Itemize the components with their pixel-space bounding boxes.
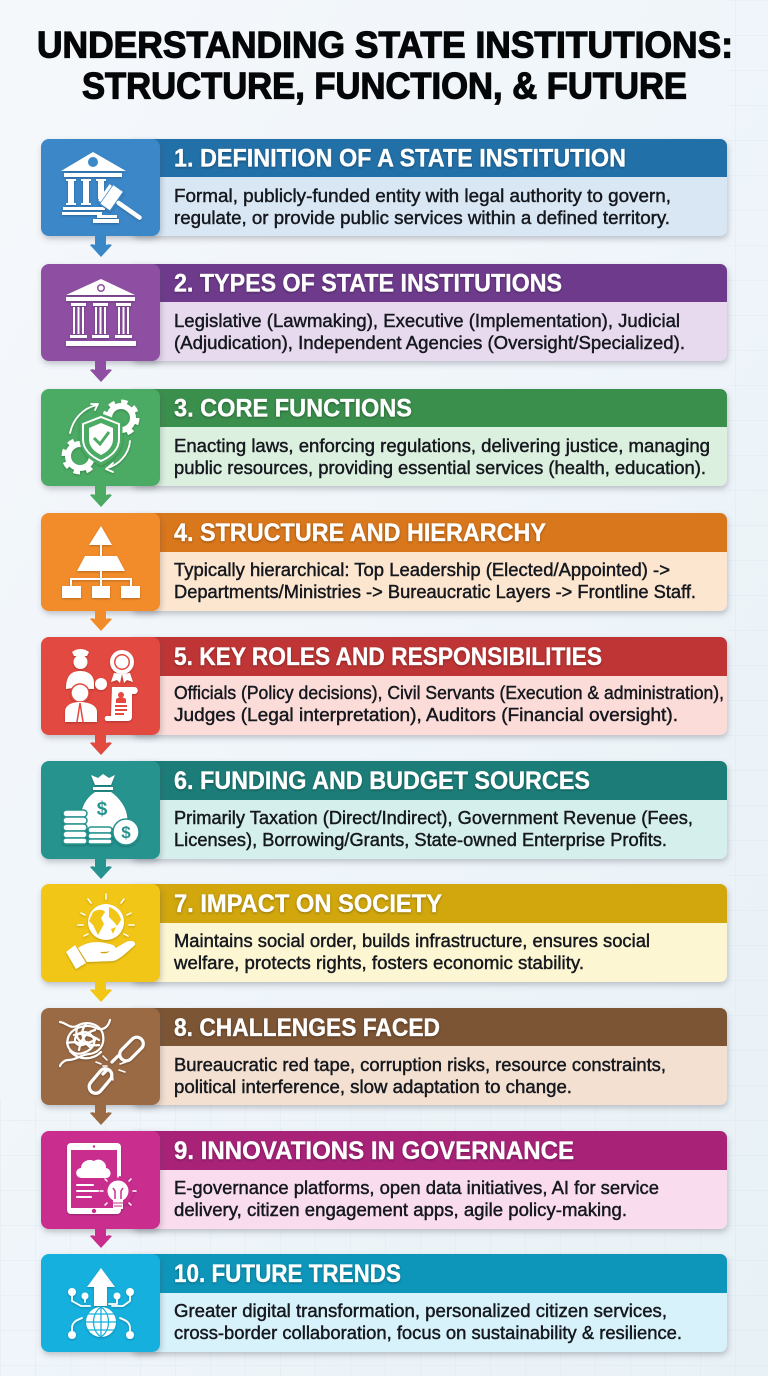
icon tile [41,637,160,735]
title [37,24,733,106]
heading: 8. CHALLENGES FACED [174,1014,440,1042]
description [174,1300,682,1343]
panel: 6 funding [41,761,727,879]
heading: 2. TYPES OF STATE INSTITUTIONS [174,270,562,298]
content panel [131,1008,727,1105]
description: Enacting laws, enforcing regulations, delivering justice, managing [174,435,710,456]
arrow to next panel [90,235,112,257]
content panel [131,389,727,486]
icon tile [41,513,160,611]
icon: money bag and coins: $ [97,799,108,820]
icon tile [41,1254,160,1352]
panel: 3 core functions [41,389,727,507]
description: Licenses), Borrowing/Grants, State-owned Enterprise Profits. [174,829,667,850]
description [174,185,671,228]
content panel [131,513,727,611]
description: Judges (Legal interpretation), Auditors (Financial oversight). [174,704,678,725]
description [174,559,696,602]
icon tile [41,884,160,982]
arrow to next panel [90,1228,112,1248]
description [173,930,650,973]
icon: money bag and coins: $ [121,823,131,842]
icon: officials, medal and scroll [65,649,138,722]
icon: tangled tape and broken chain [60,1020,146,1096]
description: Primarily Taxation (Direct/Indirect), Government Revenue (Fees, [174,807,693,828]
description: political interference, slow adaptation to change. [174,1076,572,1097]
description: (Adjudication), Independent Agencies (Oversight/Specialized). [174,332,685,353]
description: Typically hierarchical: Top Leadership (Elected/Appointed) -> [174,559,670,580]
description [174,310,685,353]
panel: 10 future trends [41,1254,727,1352]
heading: 6. FUNDING AND BUDGET SOURCES [174,767,590,795]
icon: arrow, globe and circuit [68,1268,134,1339]
icon: money bag and coins [63,774,139,845]
icon tile [41,139,160,236]
heading: 9. INNOVATIONS IN GOVERNANCE [174,1137,574,1165]
arrow to next panel [90,1104,112,1125]
panel: 1 definition [41,139,727,257]
heading: 4. STRUCTURE AND HIERARCHY [174,519,546,547]
title: UNDERSTANDING STATE INSTITUTIONS: [37,24,733,66]
arrow to next panel [90,485,112,507]
description [174,1054,666,1097]
arrow to next panel [90,734,112,755]
title: STRUCTURE, FUNCTION, & FUTURE [82,66,687,106]
panel: 9 innovations [41,1131,727,1248]
description [174,807,693,850]
content panel [131,761,727,859]
icon: hierarchy pyramid [62,526,140,598]
arrow to next panel [90,858,112,879]
content panel [131,264,727,361]
description: delivery, citizen engagement apps, agile policy-making. [174,1199,627,1220]
icon: courthouse and gavel [61,152,148,228]
content panel [131,884,727,982]
description: Formal, publicly-funded entity with legal authority to govern, [174,185,671,206]
panel: 7 impact [41,884,727,1002]
arrow to next panel [90,981,112,1002]
description: Maintains social order, builds infrastructure, ensures social [174,930,650,951]
arrow to next panel [90,610,112,631]
description: E-governance platforms, open data initiatives, AI for service [174,1177,659,1198]
icon: globe in hand [66,894,135,969]
icon: tablet, cloud and lightbulb [67,1143,136,1214]
heading: 3. CORE FUNCTIONS [174,394,412,422]
icon: gears and shield [64,402,138,472]
content panel [131,1254,727,1352]
description: Officials (Policy decisions), Civil Servants (Execution & administration), [174,682,724,703]
description: welfare, protects rights, fosters economic stability. [173,952,584,973]
icon tile [41,1008,160,1105]
panel: 8 challenges [41,1008,727,1125]
description [174,682,724,725]
description: Bureaucratic red tape, corruption risks, resource constraints, [174,1054,666,1075]
arrow to next panel [90,360,112,382]
heading: 10. FUTURE TRENDS [174,1260,401,1288]
icon tile [41,264,160,361]
description [174,435,710,478]
content panel [131,139,727,236]
description: Departments/Ministries -> Bureaucratic Layers -> Frontline Staff. [174,581,696,602]
description: Greater digital transformation, personalized citizen services, [174,1300,667,1321]
content panel [131,637,727,735]
panel: 5 key roles [41,637,727,755]
icon tile [41,389,160,486]
description [174,1177,659,1220]
description: Legislative (Lawmaking), Executive (Implementation), Judicial [174,310,680,331]
panel: 2 types [41,264,727,382]
description: cross-border collaboration, focus on sustainability & resilience. [174,1322,682,1343]
content panel [131,1131,727,1229]
description: public resources, providing essential services (health, education). [174,457,706,478]
heading: 5. KEY ROLES AND RESPONSIBILITIES [174,643,602,671]
heading: 7. IMPACT ON SOCIETY [174,890,442,918]
icon: classical building [66,279,136,346]
panel: 4 structure [41,513,727,631]
description: regulate, or provide public services within a defined territory. [174,207,670,228]
icon tile [41,761,160,859]
heading: 1. DEFINITION OF A STATE INSTITUTION [174,144,626,172]
icon tile [41,1131,160,1229]
